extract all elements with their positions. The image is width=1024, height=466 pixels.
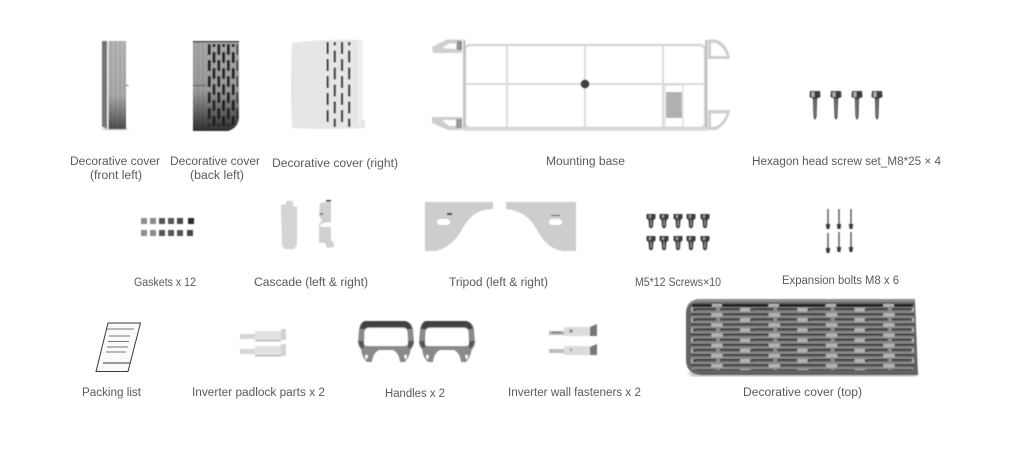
label: decorative cover back left <box>170 156 260 182</box>
label: gaskets: Gaskets x 12 <box>134 277 196 289</box>
icon: inverter plate <box>665 85 683 127</box>
label: decorative cover front left: (front left) <box>90 170 142 182</box>
item: decorative cover back left <box>170 41 260 182</box>
item: expansion bolts <box>782 209 899 287</box>
label: decorative cover top: Decorative cover (top) <box>743 387 862 399</box>
label: decorative cover back left: (back left) <box>190 170 244 182</box>
icon: handles <box>358 321 475 362</box>
icon: tripod <box>425 202 576 251</box>
item: decorative cover right <box>272 40 398 170</box>
item: mounting base <box>432 40 730 168</box>
icon: expansion bolts <box>826 209 853 253</box>
icon: padlock parts <box>240 329 286 356</box>
icon: decorative cover right <box>291 40 365 129</box>
item: handles <box>358 321 475 400</box>
icon: M5 screws <box>646 214 710 250</box>
item: hexagon head screws <box>752 91 942 168</box>
icon: decorative cover front left <box>102 41 128 130</box>
item: wall fasteners <box>508 324 641 399</box>
label: hexagon head screws: Hexagon head screw set_M8*25 × 4 <box>752 156 942 168</box>
item: decorative cover top <box>686 299 918 399</box>
icon: mounting base <box>432 40 730 131</box>
icon: wall fasteners <box>549 324 597 355</box>
icon: decorative cover back left <box>193 41 239 131</box>
label: decorative cover front left: Decorative cover <box>70 156 160 168</box>
label: decorative cover front left <box>70 156 160 182</box>
item: packing list <box>82 323 142 399</box>
item: M5 screws <box>635 214 721 289</box>
label: padlock parts: Inverter padlock parts x 2 <box>192 387 325 399</box>
right brackets <box>708 40 730 59</box>
label: tripod: Tripod (left & right) <box>449 277 548 289</box>
icon: hexagon head screws <box>810 91 882 120</box>
item: tripod <box>425 202 576 289</box>
left brackets <box>432 40 462 53</box>
item: decorative cover front left <box>70 41 160 182</box>
item: gaskets <box>134 218 196 289</box>
label: handles: Handles x 2 <box>385 388 445 400</box>
icon: cascade <box>281 200 334 249</box>
item: padlock parts <box>192 329 325 399</box>
icon: decorative cover top <box>686 299 918 376</box>
label: decorative cover right: Decorative cover (right) <box>272 158 398 170</box>
label: expansion bolts: Expansion bolts M8 x 6 <box>782 275 899 287</box>
icon: packing list <box>96 323 140 372</box>
label: packing list: Packing list <box>82 387 142 399</box>
icon: gaskets <box>141 218 194 236</box>
label: decorative cover back left: Decorative cover <box>170 156 260 168</box>
item: cascade <box>254 200 368 289</box>
icon: central hub <box>580 80 590 88</box>
label: M5 screws: M5*12 Screws×10 <box>635 277 721 289</box>
label: cascade: Cascade (left & right) <box>254 277 368 289</box>
label: wall fasteners: Inverter wall fasteners x 2 <box>508 387 641 399</box>
label: mounting base: Mounting base <box>546 156 625 168</box>
